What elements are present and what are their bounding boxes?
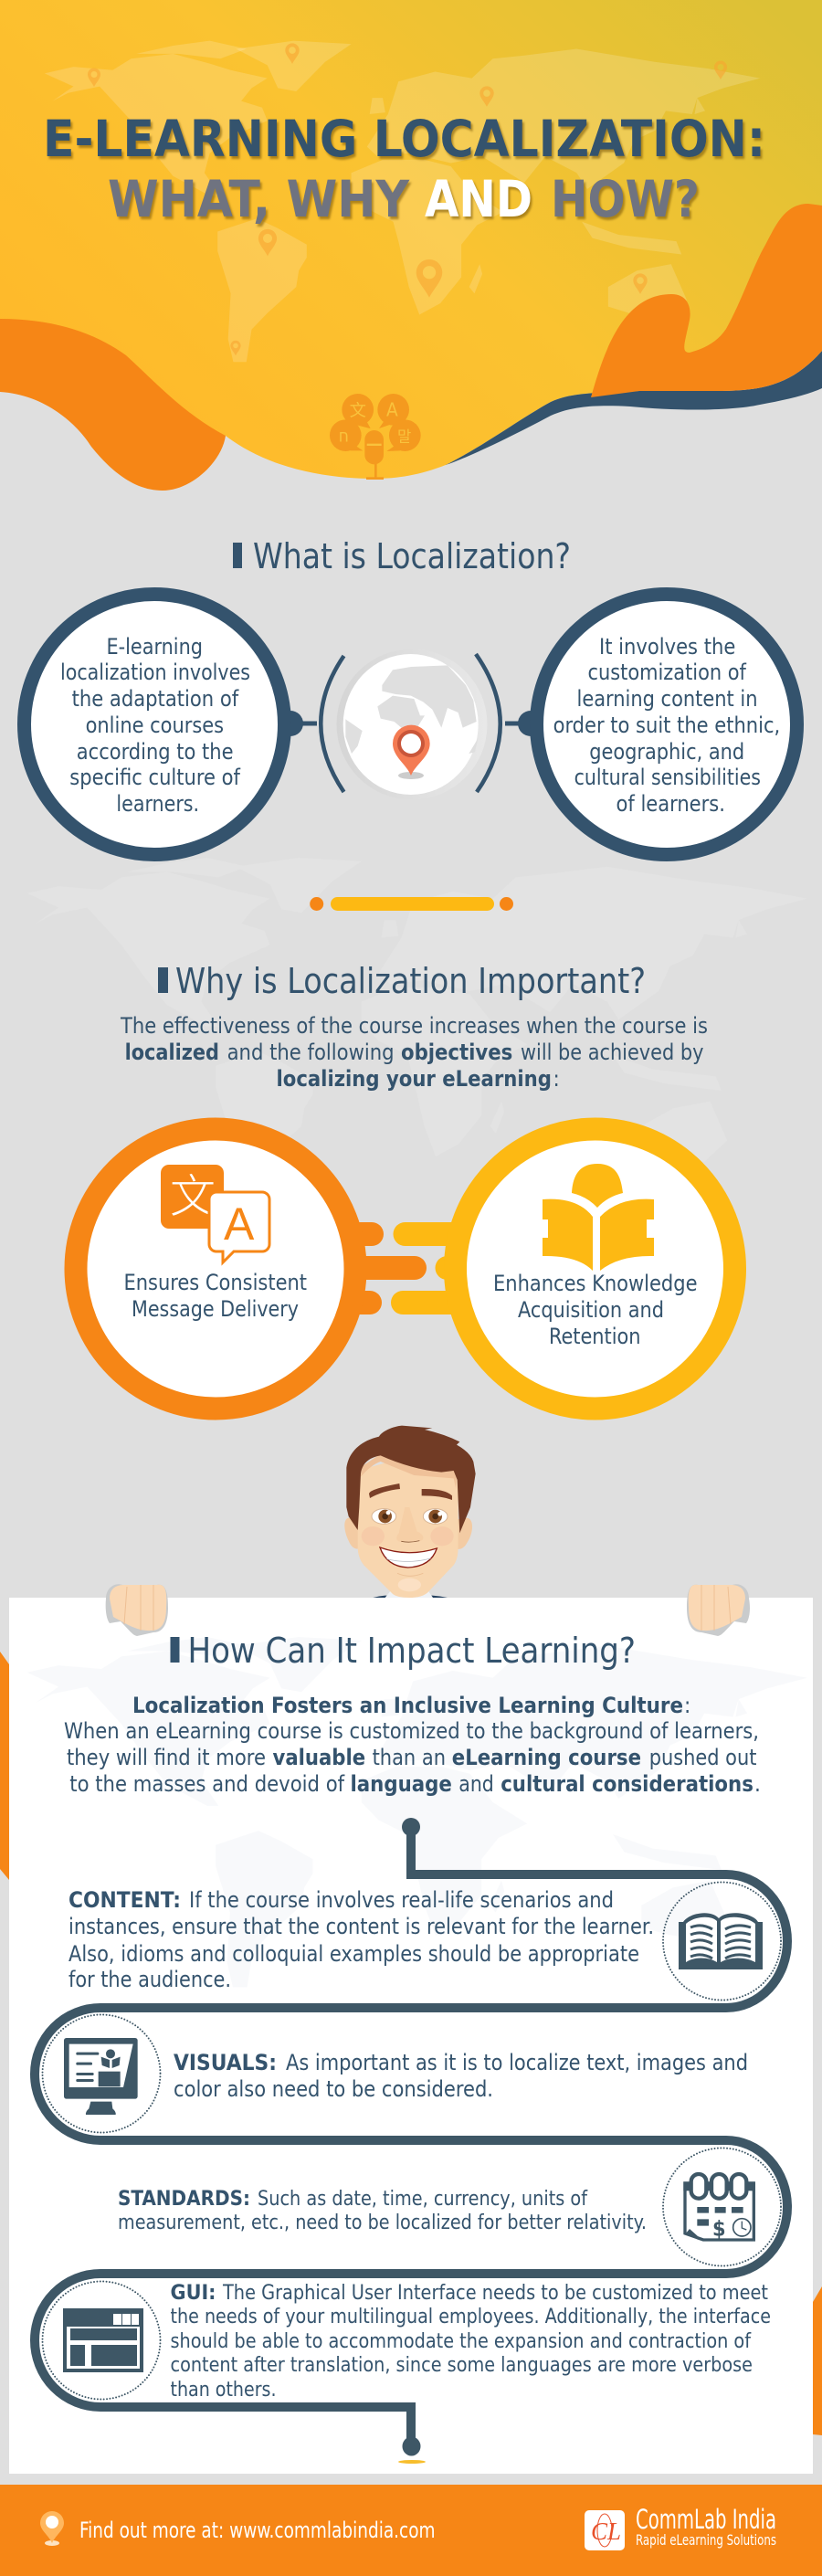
panel: left definition circle: E-learning — [106, 634, 203, 660]
panel: right definition circle: geographic, and — [589, 739, 744, 765]
icon: globe with location pin — [321, 649, 501, 800]
text block: inclusive learning culture: valuable — [272, 1745, 365, 1770]
text block: inclusive learning culture: cultural considerations — [501, 1771, 754, 1797]
icon: translate bubbles: A — [224, 1198, 255, 1250]
chain connectors between objective circles — [347, 1222, 475, 1314]
icon: multilingual microphone: ח — [339, 425, 349, 446]
panel: left definition circle: the adaptation of — [72, 686, 240, 712]
panel: objective knowledge retention: Enhances Knowledge — [493, 1271, 698, 1296]
title: HOW? — [551, 170, 700, 228]
heading: what is localization: What is Localization? — [253, 536, 571, 576]
text block: why intro: localizing your eLearning — [276, 1066, 552, 1092]
text block: why intro: and the following — [227, 1040, 395, 1065]
panel: gui: than others. — [170, 2379, 276, 2402]
panel: right definition circle: customization of — [588, 660, 747, 685]
text block: inclusive learning culture: they will find it more — [67, 1745, 266, 1770]
footer: Find out more at: www.commlabindia.com — [79, 2518, 435, 2543]
panel: standards — [118, 2148, 781, 2265]
title: E-LEARNING LOCALIZATION: — [43, 110, 765, 168]
text block: why intro: will be achieved by — [521, 1040, 704, 1065]
text block: inclusive learning culture: . — [754, 1771, 761, 1797]
text block: inclusive learning culture: Localization Fosters an Inclusive Learning Culture — [132, 1693, 683, 1718]
divider — [310, 897, 513, 911]
orange side accents — [0, 1652, 822, 2435]
panel: content: instances, ensure that the content is relevant for the learner. — [68, 1914, 654, 1939]
logo: commlab india: CL — [591, 2518, 621, 2545]
panel: left definition circle: localization involves — [60, 660, 250, 685]
text block: inclusive learning culture: to the masses and devoid of — [69, 1771, 345, 1797]
text block: why intro: objectives — [401, 1040, 512, 1065]
text block: why intro: localized — [125, 1040, 219, 1065]
text block: why intro — [120, 1013, 708, 1092]
icon: multilingual microphone — [330, 394, 421, 480]
text block: why intro: : — [553, 1066, 560, 1092]
panel: content — [68, 1882, 781, 2001]
hair — [346, 1426, 476, 1533]
location pins on map — [88, 43, 727, 355]
title: AND — [425, 170, 532, 228]
character: smiling man — [344, 1426, 476, 1598]
panel: objective consistent message: Ensures Consistent — [124, 1270, 307, 1295]
panel: gui: The Graphical User Interface needs to be customized to meet — [222, 2282, 768, 2305]
panel: right definition circle: cultural sensibilities — [574, 765, 761, 790]
navy wave — [446, 351, 822, 465]
icon: right hand holding sheet — [687, 1584, 750, 1636]
panel: gui: GUI: — [170, 2282, 216, 2305]
collar — [373, 1596, 448, 1598]
heading: why is localization important: Why is Localization Important? — [175, 961, 646, 1001]
panel: content: for the audience. — [68, 1967, 231, 1992]
icon: multilingual microphone: 文 — [350, 397, 366, 421]
nose — [396, 1507, 423, 1542]
panel: right definition circle: learning content in — [577, 686, 758, 712]
panel: impact on learning sheet — [9, 1598, 813, 2474]
header banner — [0, 0, 822, 491]
panel: content: Also, idioms and colloquial examples should be appropriate — [68, 1941, 639, 1967]
panel: objective knowledge retention: Acquisition and — [518, 1297, 664, 1323]
text block: inclusive learning culture: When an eLearning course is customized to the background of learners, — [64, 1718, 759, 1744]
background world map, grey section — [27, 858, 807, 1208]
panel: objective consistent message — [76, 1129, 355, 1409]
icon: application window — [63, 2308, 143, 2372]
panel: left definition circle: according to the — [77, 739, 234, 765]
icon: person reading book — [543, 1164, 654, 1271]
panel: left definition circle: specific culture of — [69, 765, 241, 790]
icon: calendar with currency and clock — [683, 2174, 755, 2241]
text block: inclusive learning culture: language — [351, 1771, 452, 1797]
panel: standards: measurement, etc., need to be localized for better relativity. — [118, 2212, 647, 2234]
heading: how can it impact learning: How Can It Impact Learning? — [188, 1631, 636, 1671]
panel: left definition circle: online courses — [86, 713, 224, 738]
eyebrows — [369, 1483, 400, 1498]
title — [43, 110, 765, 228]
panel: gui — [42, 2282, 771, 2402]
left orange wave — [0, 319, 226, 491]
panel: objective knowledge retention: Retention — [549, 1324, 641, 1349]
right orange wave — [591, 204, 822, 397]
icon: monitor — [64, 2038, 138, 2115]
text block: inclusive learning culture: : — [684, 1693, 690, 1718]
icon: translate bubbles: 文 — [170, 1160, 216, 1226]
panel: visuals: VISUALS: — [174, 2050, 277, 2075]
serpentine path connector — [35, 1818, 787, 2464]
icon: left hand holding sheet — [106, 1584, 168, 1636]
panel: objective consistent message: Message Delivery — [132, 1296, 299, 1322]
text block: inclusive learning culture: than an — [373, 1745, 446, 1770]
icon: multilingual microphone: A — [386, 398, 398, 420]
text block: inclusive learning culture: and — [458, 1771, 494, 1797]
panel: visuals: color also need to be considered. — [174, 2076, 493, 2102]
text block: inclusive learning culture: pushed out — [649, 1745, 756, 1770]
header world map — [45, 41, 760, 362]
text block: inclusive learning culture — [64, 1693, 761, 1797]
panel: content: CONTENT: — [68, 1887, 181, 1913]
panel: content: If the course involves real-life scenarios and — [189, 1887, 614, 1913]
face — [358, 1455, 458, 1598]
logo: commlab india: CommLab India — [636, 2504, 776, 2535]
eyes — [372, 1509, 396, 1524]
icon: translate bubbles — [161, 1160, 269, 1262]
title: WHAT, WHY — [108, 170, 410, 228]
panel: left definition circle: learners. — [116, 791, 199, 817]
logo: commlab india — [585, 2504, 776, 2550]
icon: multilingual microphone: 말 — [397, 424, 411, 446]
icon: open book — [679, 1913, 763, 1969]
icon: footer location pin — [40, 2511, 64, 2546]
background world map, white sheet — [27, 1637, 807, 1987]
panel: right definition circle: It involves the — [599, 634, 735, 660]
icon: calendar with currency and clock: $ — [712, 2215, 726, 2241]
panel: gui: should be able to accommodate the expansion and contraction of — [170, 2330, 752, 2353]
panel: gui: the needs of your multilingual employees. Additionally, the interface — [170, 2306, 771, 2328]
panel: visuals — [42, 2015, 748, 2132]
panel: gui: content after translation, since some languages are more verbose — [170, 2354, 753, 2377]
panel: right definition circle: order to suit the ethnic, — [553, 713, 780, 738]
panel: objective knowledge retention — [455, 1129, 734, 1409]
panel: visuals: As important as it is to localize text, images and — [286, 2050, 748, 2075]
panel: standards: STANDARDS: — [118, 2188, 250, 2211]
text block: inclusive learning culture: eLearning course — [452, 1745, 641, 1770]
panel: right definition circle: of learners. — [616, 791, 725, 817]
panel: left definition circle — [24, 594, 317, 855]
panel: standards: Such as date, time, currency, units of — [258, 2188, 588, 2211]
text block: why intro: The effectiveness of the course increases when the course is — [120, 1013, 708, 1039]
mouth — [380, 1547, 437, 1568]
logo: commlab india: Rapid eLearning Solutions — [636, 2531, 776, 2549]
panel: right definition circle — [505, 594, 796, 855]
ears — [344, 1518, 359, 1549]
footer — [0, 2485, 822, 2576]
